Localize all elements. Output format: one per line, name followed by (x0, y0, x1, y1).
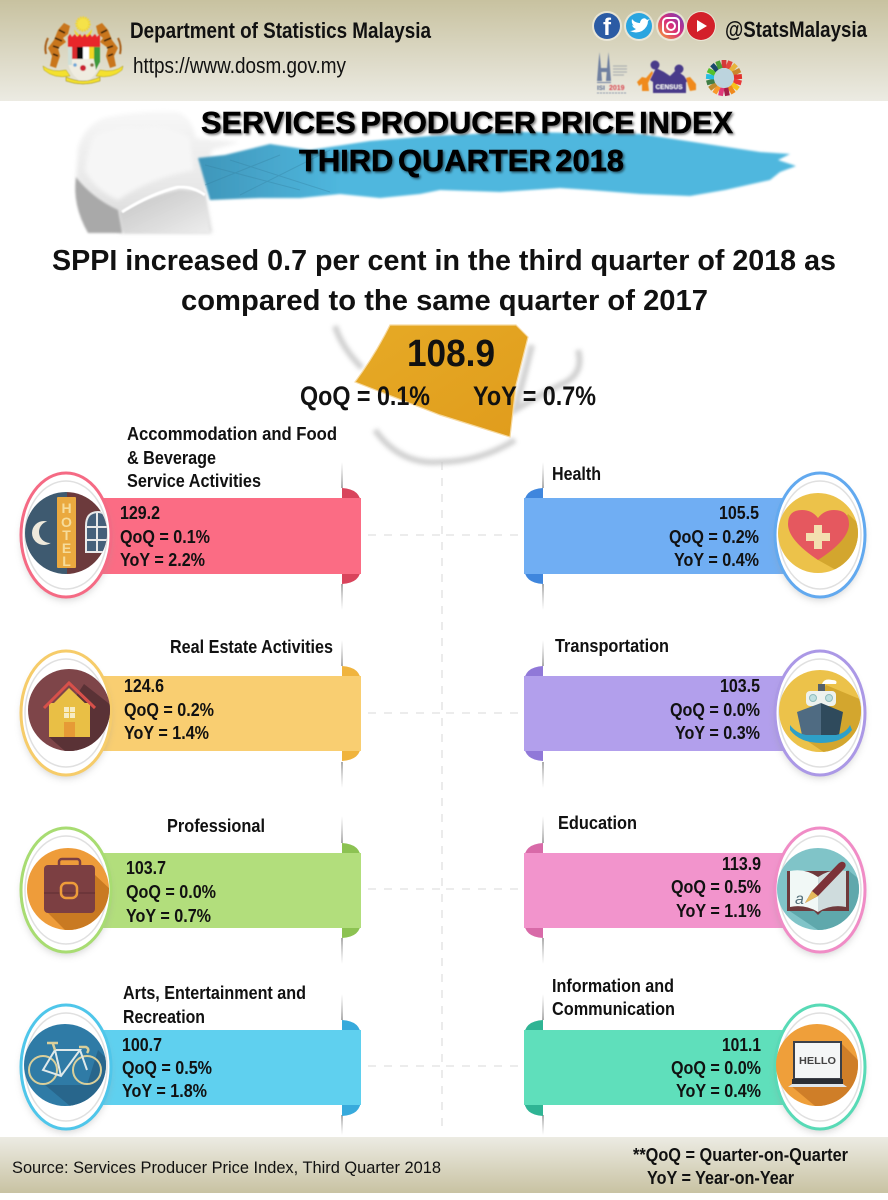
medallion ring (21, 473, 111, 600)
label: information (552, 976, 675, 1019)
ribbon (524, 843, 784, 938)
title: SERVICES PRODUCER PRICE INDEX (201, 105, 733, 140)
footer band (0, 1137, 888, 1193)
label: information: Communication (552, 999, 675, 1019)
label: arts (123, 983, 306, 1027)
headline statement (52, 245, 836, 317)
overall index value: 108.9 (407, 333, 495, 375)
values: real estate (124, 676, 214, 743)
values: education: 113.9 (722, 854, 761, 874)
logo: ISI 2019: 2019 (609, 85, 625, 92)
values: health: 105.5 (719, 503, 759, 523)
icon: hotel: L (62, 553, 71, 569)
panel: information and communication (524, 976, 865, 1135)
values: health (669, 503, 759, 570)
title (201, 105, 733, 178)
source note: Source: Services Producer Price Index, Third Quarter 2018 (12, 1158, 441, 1177)
icon: Malaysia coat of arms (43, 18, 123, 84)
logo: ISI 2019 (597, 52, 627, 93)
icon: hotel (25, 492, 109, 574)
abbreviations legend: **QoQ = Quarter-on-Quarter (633, 1145, 848, 1165)
panel: arts and recreation (21, 983, 361, 1135)
title: THIRD QUARTER 2018 (299, 143, 624, 178)
values: transportation: QoQ = 0.0% (670, 700, 760, 720)
label: accommodation: Accommodation and Food (127, 424, 337, 444)
label: arts: Recreation (123, 1007, 205, 1027)
values: information: YoY = 0.4% (676, 1081, 761, 1101)
icon: house (27, 668, 112, 752)
logo: census 2020: CENSUS (655, 84, 683, 91)
label: education: Education (558, 813, 637, 833)
values: accommodation: QoQ = 0.1% (120, 527, 210, 547)
logo: census 2020 (637, 60, 696, 93)
values: professional (126, 858, 216, 926)
ribbon (100, 488, 361, 584)
values: arts: QoQ = 0.5% (122, 1058, 212, 1078)
label: professional: Professional (167, 816, 265, 836)
ribbon (100, 843, 361, 938)
values: transportation (670, 676, 760, 743)
medallion ring (775, 473, 865, 600)
gold patch (355, 325, 528, 437)
logo: ISI 2019: ISI (597, 85, 605, 92)
abbreviations legend: YoY = Year-on-Year (647, 1168, 794, 1188)
ribbon (524, 666, 784, 761)
medallion ring (775, 1005, 865, 1132)
values: information: QoQ = 0.0% (671, 1058, 761, 1078)
icon: laptop (775, 1024, 860, 1106)
website url: https://www.dosm.gov.my (133, 53, 346, 78)
icon: facebook (592, 11, 622, 41)
panel: professional (21, 816, 361, 964)
values: education: YoY = 1.1% (676, 901, 761, 921)
icon: youtube (686, 11, 716, 41)
label: accommodation (127, 424, 337, 491)
medallion ring (775, 651, 865, 778)
ribbon (524, 488, 784, 584)
values: professional: QoQ = 0.0% (126, 882, 216, 902)
label: accommodation: & Beverage (127, 448, 216, 468)
icon: book and pen: a (795, 891, 804, 908)
panel: real estate (21, 637, 361, 788)
torn paper roll (75, 112, 240, 233)
icon: bicycle (24, 1024, 108, 1106)
icon: instagram (656, 11, 686, 41)
values: professional: YoY = 0.7% (126, 906, 211, 926)
overall QoQ: QoQ = 0.1% (300, 381, 430, 411)
icon: book and pen (777, 848, 860, 930)
values: information: 101.1 (722, 1035, 761, 1055)
values: arts: YoY = 1.8% (122, 1081, 207, 1101)
values: information (671, 1035, 761, 1101)
icon: twitter (624, 11, 654, 41)
values: accommodation: 129.2 (120, 503, 160, 523)
label: accommodation: Service Activities (127, 471, 261, 491)
icon: briefcase (27, 848, 111, 930)
values: transportation: 103.5 (720, 676, 760, 696)
social handle: @StatsMalaysia (725, 17, 868, 42)
icon: ship (778, 669, 862, 753)
icon: laptop: HELLO (799, 1055, 836, 1067)
values: professional: 103.7 (126, 858, 166, 878)
medallion ring (775, 828, 865, 955)
panel: health (524, 462, 865, 610)
central timeline (368, 462, 518, 1130)
headline statement: SPPI increased 0.7 per cent in the third quarter of 2018 as (52, 245, 836, 277)
abbreviations legend (633, 1145, 848, 1188)
values: health: YoY = 0.4% (674, 550, 759, 570)
logo: SDG wheel (706, 60, 742, 96)
label: health: Health (552, 464, 601, 484)
values: health: QoQ = 0.2% (669, 527, 759, 547)
overall index badge (300, 325, 596, 462)
values: accommodation (120, 503, 210, 570)
values: transportation: YoY = 0.3% (675, 723, 760, 743)
headline statement: compared to the same quarter of 2017 (181, 285, 708, 317)
ribbon (100, 666, 361, 761)
values: accommodation: YoY = 2.2% (120, 550, 205, 570)
icon: hotel: O (61, 514, 72, 530)
label: transportation: Transportation (555, 636, 669, 656)
ribbon (524, 1020, 784, 1116)
blue brush stroke (198, 132, 796, 200)
medallion ring (21, 1005, 111, 1132)
values: education (671, 854, 761, 921)
medallion ring (21, 651, 111, 778)
ribbon (100, 1020, 361, 1116)
overall YoY: YoY = 0.7% (473, 381, 596, 411)
icon: heart (777, 492, 860, 575)
values: arts (122, 1035, 212, 1101)
icon: hotel: E (62, 540, 71, 556)
icon: hotel: H (61, 500, 72, 516)
organisation name: Department of Statistics Malaysia (130, 18, 432, 43)
panel: education (524, 813, 865, 964)
values: real estate: YoY = 1.4% (124, 723, 209, 743)
panel: transportation (524, 636, 865, 788)
label: arts: Arts, Entertainment and (123, 983, 306, 1003)
values: arts: 100.7 (122, 1035, 162, 1055)
values: education: QoQ = 0.5% (671, 877, 761, 897)
icon: facebook: f (603, 14, 612, 41)
icon: hotel: T (62, 527, 71, 543)
medallion ring (21, 828, 111, 955)
torn paper shadows (335, 326, 580, 462)
values: real estate: 124.6 (124, 676, 164, 696)
label: real estate: Real Estate Activities (170, 637, 333, 657)
title banner: torn paper and blue brush (75, 112, 796, 233)
values: real estate: QoQ = 0.2% (124, 700, 214, 720)
label: information: Information and (552, 976, 674, 996)
header band (0, 0, 888, 101)
panel: accommodation and food (21, 424, 361, 610)
